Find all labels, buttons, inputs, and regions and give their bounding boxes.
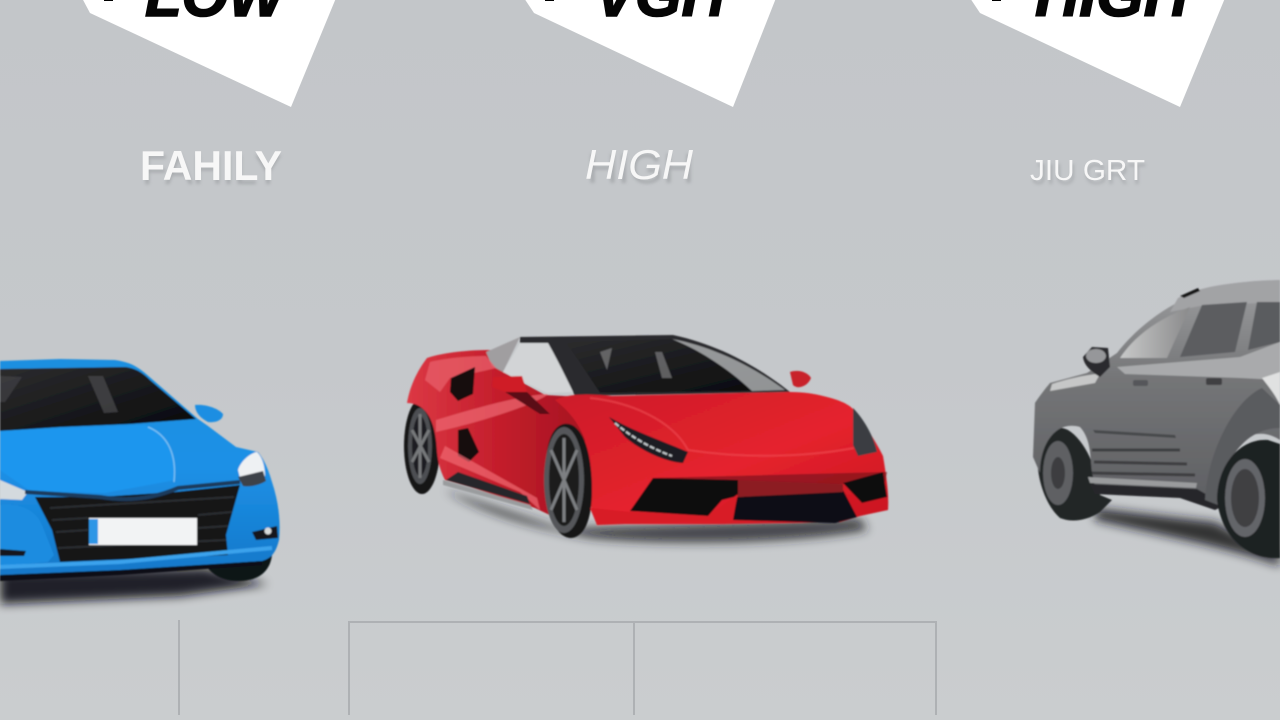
car: grey suv <box>1033 280 1280 566</box>
front side window <box>1120 307 1190 358</box>
cabin seats <box>600 348 672 378</box>
windshield reflections <box>88 376 118 413</box>
tag: very high <box>524 0 776 107</box>
tag: low <box>82 0 336 107</box>
roof band <box>1170 280 1280 312</box>
sill <box>1088 477 1197 488</box>
rear wheel <box>1037 428 1112 520</box>
rear wheel <box>404 398 440 494</box>
front centre intake <box>733 490 857 523</box>
side mirror <box>1083 347 1110 377</box>
lower table outline <box>179 620 936 715</box>
left headlight <box>609 417 688 463</box>
hood highlight <box>1050 374 1100 391</box>
hood highlight <box>0 425 175 493</box>
front wheel arch <box>1205 388 1280 505</box>
body <box>0 359 280 575</box>
left mirror <box>492 376 527 392</box>
front wheel <box>544 424 592 538</box>
left headlight <box>0 480 28 500</box>
hood and nose <box>555 392 888 524</box>
right headlight <box>853 408 877 456</box>
front lip <box>590 494 738 525</box>
front intake left <box>630 478 742 516</box>
car: blue family hatchback <box>0 359 280 604</box>
sill <box>443 480 533 510</box>
tag: high <box>970 0 1225 107</box>
lower door crease <box>1093 430 1176 438</box>
label: jiu grt: JIU GRT <box>1030 155 1145 187</box>
left bumper <box>0 505 54 566</box>
windshield <box>565 339 785 393</box>
nose shading band <box>653 472 887 488</box>
label: family: FAHILY <box>142 146 282 193</box>
lower fog lamp right <box>252 526 278 540</box>
body side <box>407 350 600 520</box>
shoulder highlight <box>1117 342 1280 380</box>
body <box>1033 280 1280 500</box>
side window <box>503 343 573 393</box>
ground shadow <box>445 490 868 543</box>
door highlight <box>440 446 540 510</box>
rear window <box>1248 302 1280 350</box>
roof rail <box>1180 288 1200 298</box>
door handles <box>1133 380 1148 386</box>
side highlight <box>436 394 548 432</box>
front wheel <box>1217 440 1280 558</box>
white highlight near arch <box>1262 372 1280 405</box>
car: red sports car <box>404 335 888 543</box>
label: high: HIGH <box>585 141 694 188</box>
grille upper trim <box>25 482 240 499</box>
front right tire <box>203 555 272 581</box>
rear glass <box>486 337 520 372</box>
bumper lip <box>0 548 272 567</box>
side vent <box>458 428 479 462</box>
label: jiu grt: JIU GRT <box>1032 159 1146 191</box>
ground shadow <box>0 568 268 604</box>
roof and windshield frame <box>520 335 790 396</box>
lower fog lamp left <box>0 549 26 556</box>
lower cladding lines <box>1092 450 1195 475</box>
hood crease <box>590 398 854 456</box>
licence plate <box>89 518 197 545</box>
side intake <box>450 367 475 401</box>
right headlight <box>238 452 265 478</box>
ground shadow <box>1095 508 1280 566</box>
right mirror <box>790 371 811 387</box>
label: family: FAHILY <box>140 142 282 189</box>
grille <box>35 485 240 562</box>
side mirror <box>195 405 223 422</box>
label: high: HIGH <box>587 145 694 192</box>
front intake right <box>843 472 887 503</box>
rear quarter highlight <box>425 356 496 392</box>
rear side window <box>1180 302 1247 357</box>
windshield <box>0 367 196 431</box>
